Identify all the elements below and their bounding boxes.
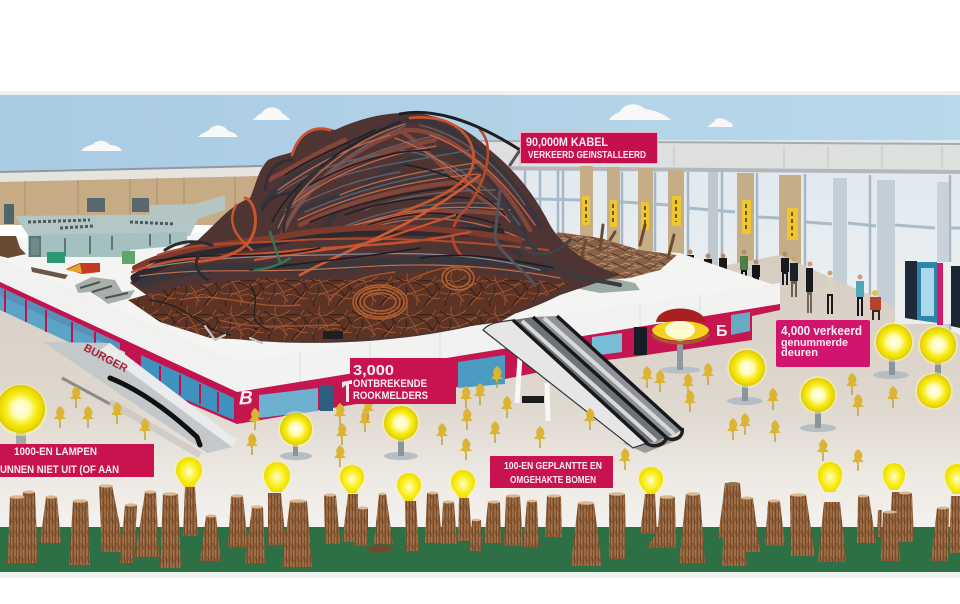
- wire mat: [128, 268, 572, 342]
- stump: [722, 482, 747, 566]
- stump: [120, 503, 137, 563]
- bulb: [338, 464, 366, 493]
- restaurant sign: BURGER: [82, 342, 129, 375]
- stump: [818, 502, 846, 562]
- pile body: [130, 113, 620, 343]
- dome strands: [262, 120, 540, 255]
- callout: doors: 4,000 verkeerd: [781, 323, 862, 338]
- cloud: [81, 141, 122, 151]
- stump: [374, 493, 393, 544]
- person: [826, 270, 834, 314]
- chart: cable pile: [128, 112, 677, 343]
- callout: lamps: [0, 444, 154, 477]
- left knot: [195, 198, 255, 262]
- stump: [931, 506, 949, 561]
- stump: [647, 495, 676, 548]
- left escalator: [43, 342, 237, 455]
- stump: [609, 492, 626, 559]
- lamps on stands: [0, 322, 958, 460]
- stump: [40, 495, 61, 543]
- stump: [200, 514, 221, 561]
- lamp stand: [873, 322, 914, 379]
- stump: [545, 494, 562, 537]
- stump: [718, 483, 735, 538]
- lamps on stumps: [174, 456, 960, 501]
- bulb: [174, 456, 204, 487]
- escalator supports: [517, 357, 548, 421]
- panel: concourse floor: [0, 255, 960, 530]
- stump: [484, 500, 501, 543]
- stump: [765, 500, 785, 546]
- storefront windows: [0, 287, 120, 366]
- stump: [890, 492, 901, 527]
- stump: [857, 494, 876, 543]
- person: [790, 256, 798, 297]
- stump: [640, 494, 657, 534]
- stump: [69, 499, 90, 565]
- stump: [183, 487, 198, 536]
- cloud: [707, 118, 733, 127]
- stump: [99, 484, 125, 552]
- stump: [354, 506, 368, 546]
- lamp stand: [727, 348, 767, 405]
- panel: back building left: [0, 165, 262, 225]
- bulb: [449, 469, 477, 498]
- columns: [580, 166, 949, 340]
- lamp stand: [382, 404, 420, 460]
- stump: [896, 492, 914, 542]
- callout: cables: VERKEERD GEINSTALLEERD: [528, 150, 646, 161]
- stump: [441, 500, 457, 544]
- person: [704, 254, 712, 284]
- people: [686, 250, 881, 320]
- green lawn: [0, 527, 960, 572]
- highlighted orange loops: [292, 117, 474, 215]
- yellow sprouts: [54, 363, 899, 471]
- rooftop debris left: [0, 236, 135, 304]
- callout: smoke detectors: 3,000: [353, 362, 394, 379]
- person: [719, 254, 727, 282]
- stump: [790, 493, 815, 556]
- person: [740, 250, 748, 284]
- panel: sky with clouds: [0, 95, 960, 185]
- callout: trees: OMGEHAKTE BOMEN: [510, 475, 596, 486]
- stump: [523, 500, 539, 547]
- bulb: [881, 462, 907, 490]
- callout: smoke detectors: ONTBREKENDE: [353, 378, 427, 390]
- stump: [458, 498, 472, 541]
- person: [856, 274, 864, 316]
- steps lane two: [533, 316, 682, 438]
- person: [686, 250, 694, 281]
- panel: right glass hall: [480, 140, 960, 340]
- sign letter: Б: [716, 323, 728, 340]
- stump debris: [366, 544, 394, 553]
- bulb: [395, 472, 423, 501]
- person: [781, 252, 789, 285]
- stump: [425, 492, 442, 543]
- person: [752, 260, 760, 287]
- sign letter: B: [239, 388, 253, 409]
- panel: right fascia: [237, 283, 780, 424]
- callout: doors: [776, 320, 870, 367]
- lamp stand: [918, 325, 958, 376]
- callout: cables: 90,000M KABEL: [526, 135, 608, 149]
- panel: building roof: [0, 230, 780, 362]
- roof litter: [323, 331, 343, 339]
- right escalator: [483, 316, 683, 453]
- stump: [949, 496, 960, 553]
- stump: [18, 490, 38, 563]
- stump: [571, 501, 602, 566]
- stump: [324, 493, 340, 544]
- bulb: [943, 463, 960, 494]
- stump: [135, 490, 159, 557]
- stump: [245, 505, 265, 563]
- panel: left fascia: [0, 258, 237, 424]
- window band: [259, 388, 318, 418]
- stump: [282, 499, 312, 567]
- outer balustrade: [483, 320, 647, 448]
- callout: doors: deuren: [781, 347, 818, 359]
- callout: trees: [490, 456, 613, 488]
- cloud: [609, 104, 671, 120]
- lamp stand: [278, 411, 314, 460]
- windows: [497, 170, 960, 340]
- panel: rooftop HVAC units: [4, 195, 225, 264]
- callout: smoke detectors: [342, 358, 456, 404]
- bulb: [816, 461, 844, 492]
- stump: [6, 495, 32, 563]
- bottom frame strip: [0, 572, 960, 578]
- callout: trees: 100-EN GEPLANTTE EN: [504, 461, 602, 472]
- stump: [470, 519, 482, 551]
- stump: [160, 492, 181, 568]
- burger lamp: [652, 308, 709, 374]
- bulb: [637, 466, 665, 494]
- stump: [679, 492, 705, 563]
- coil: [353, 266, 474, 319]
- callout: lamps: UNNEN NIET UIT (OF AAN: [0, 464, 119, 476]
- person: [806, 262, 813, 313]
- scrap pile right: [548, 232, 677, 282]
- callout: smoke detectors: ROOKMELDERS: [353, 390, 428, 402]
- callout: cables: [520, 132, 658, 164]
- panel: doors right: [895, 261, 960, 328]
- stump: [342, 494, 358, 542]
- top frame strip: [0, 91, 960, 96]
- stump: [405, 501, 419, 551]
- stump: [504, 494, 523, 546]
- stump: [268, 493, 286, 545]
- callout: doors: genummerde: [781, 337, 848, 349]
- lamp: [915, 372, 953, 410]
- stump: [881, 510, 900, 561]
- lamp stand: [799, 376, 837, 432]
- cloud: [198, 126, 238, 137]
- cloud: [252, 107, 290, 120]
- tree stumps: [6, 482, 960, 568]
- horizontal bundles: [135, 231, 500, 278]
- right side dark strands: [500, 200, 620, 285]
- person: [870, 290, 881, 320]
- bulb: [262, 461, 292, 492]
- stump: [877, 510, 882, 537]
- steps lane one: [513, 317, 667, 443]
- yellow banners: [582, 196, 798, 240]
- stump: [741, 496, 760, 552]
- lamp stand: [0, 384, 47, 446]
- callout: lamps: 1000-EN LAMPEN: [14, 446, 97, 458]
- stump: [228, 494, 248, 547]
